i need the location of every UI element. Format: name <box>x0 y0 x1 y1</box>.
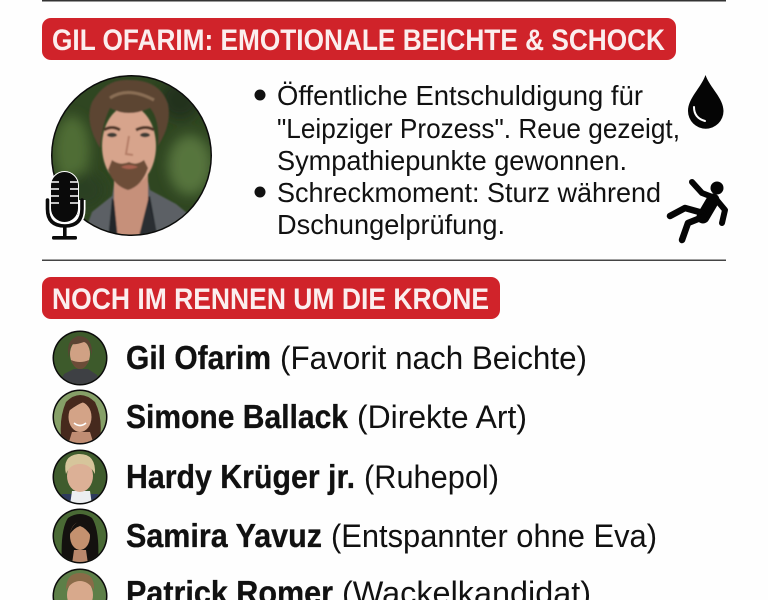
row: Simone Ballack <box>52 389 527 445</box>
bullet list: Gil Ofarim <box>254 80 680 240</box>
row: Gil Ofarim: (Favorit nach Beichte) <box>280 340 587 376</box>
row: Simone Ballack: Simone Ballack <box>126 398 349 435</box>
heading: Noch im Rennen banner: NOCH IM RENNEN UM DIE KRONE <box>52 283 489 316</box>
row: Patrick Romer <box>52 568 591 600</box>
bullet list: Gil Ofarim: Schreckmoment: Sturz während <box>277 177 661 208</box>
panel: Gil Ofarim <box>42 18 725 240</box>
row: Gil Ofarim: Gil Ofarim <box>126 339 271 376</box>
icon: water drop <box>688 75 724 129</box>
heading: Gil Ofarim banner: GIL OFARIM: EMOTIONALE BEICHTE & SCHOCK <box>52 24 665 57</box>
row: Samira Yavuz: (Entspannter ohne Eva) <box>331 518 657 554</box>
bullet list: Gil Ofarim: "Leipziger Prozess". Reue gezeigt, <box>277 113 680 144</box>
icon: falling person <box>670 182 725 240</box>
bullet list: Gil Ofarim: Dschungelprüfung. <box>277 209 505 240</box>
row: Gil Ofarim <box>52 330 587 386</box>
bullet list: Gil Ofarim: Sympathiepunkte gewonnen. <box>277 145 627 176</box>
row: Hardy Krüger jr. <box>52 449 499 505</box>
icon: microphone <box>48 171 82 240</box>
row: Simone Ballack: (Direkte Art) <box>357 399 527 435</box>
row: Samira Yavuz <box>52 508 657 564</box>
row: Samira Yavuz: Samira Yavuz <box>126 517 322 554</box>
panel: Noch im Rennen <box>42 277 657 600</box>
row: Hardy Krüger jr.: Hardy Krüger jr. <box>126 458 355 495</box>
bullet list: Gil Ofarim: Öffentliche Entschuldigung für <box>277 80 643 111</box>
portrait: Gil Ofarim <box>50 74 214 240</box>
row: Hardy Krüger jr.: (Ruhepol) <box>364 459 499 495</box>
